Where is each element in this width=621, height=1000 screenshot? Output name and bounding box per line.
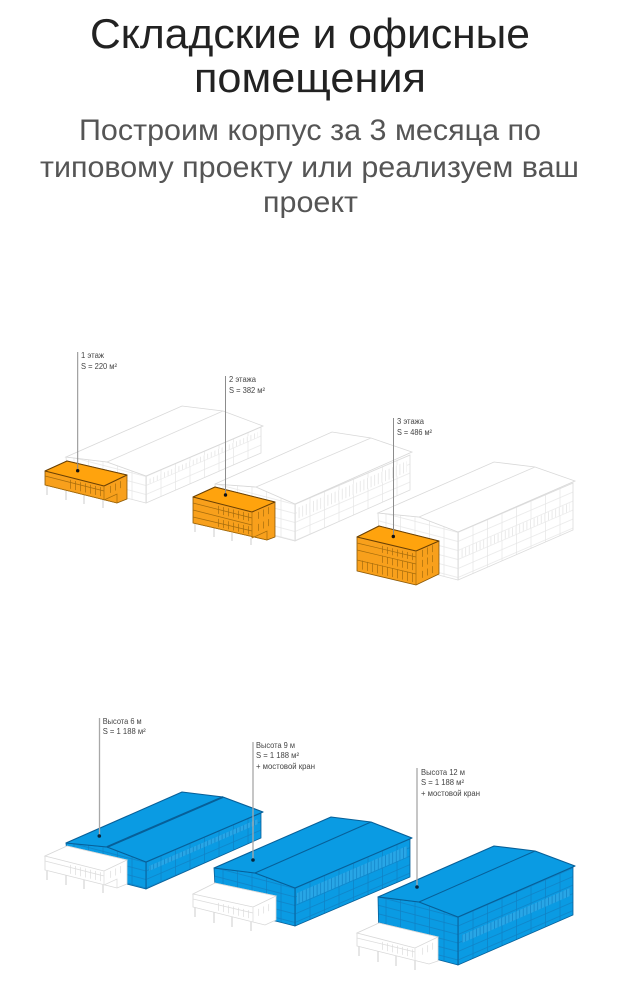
subtitle: проект	[263, 186, 358, 219]
warehouse outline 3	[378, 462, 575, 580]
title: Складские и офисные	[90, 10, 530, 57]
blue warehouse: 6 m	[66, 792, 263, 889]
blue warehouse: 9 m	[214, 817, 412, 926]
diagram: office block options	[45, 351, 575, 585]
title	[90, 10, 530, 101]
orange block: 1 floor	[45, 461, 127, 508]
callout: 3 floors: 3 этажа	[397, 417, 425, 426]
callout: height 12 m: Высота 12 м	[421, 768, 465, 777]
subtitle: Построим корпус за 3 месяца по	[79, 114, 541, 147]
white block under 12 m warehouse	[357, 923, 438, 970]
callout: 2 floors	[224, 375, 265, 497]
callout: 2 floors: 2 этажа	[229, 375, 257, 384]
callout: height 12 m: S = 1 188 м²	[421, 778, 464, 787]
callout: height 9 m: S = 1 188 м²	[256, 751, 299, 760]
callout: height 9 m	[251, 741, 315, 862]
orange block: 2 floors	[193, 487, 275, 545]
white block under 9 m warehouse	[193, 883, 276, 931]
callout: height 12 m	[415, 768, 480, 889]
subtitle	[40, 114, 579, 219]
callout: 1 floor	[76, 351, 117, 472]
warehouse outline 2	[215, 432, 412, 541]
callout: height 6 m: S = 1 188 м²	[103, 727, 146, 736]
orange block: 3 floors	[357, 526, 439, 585]
diagram: warehouse height options	[45, 717, 575, 970]
callout: 1 floor: 1 этаж	[81, 351, 105, 360]
callout: 3 floors: S = 486 м²	[397, 428, 432, 437]
callout: height 12 m: + мостовой кран	[421, 789, 480, 798]
callout: 3 floors	[392, 417, 432, 538]
callout: height 6 m: Высота 6 м	[103, 717, 142, 726]
blue warehouse: 12 m	[378, 846, 575, 965]
title: помещения	[194, 54, 426, 101]
callout: height 6 m	[98, 717, 146, 838]
callout: height 9 m: + мостовой кран	[256, 762, 315, 771]
white block under 6 m warehouse	[45, 846, 127, 893]
callout: 1 floor: S = 220 м²	[81, 362, 117, 371]
callout: 2 floors: S = 382 м²	[229, 386, 265, 395]
callout: height 9 m: Высота 9 м	[256, 741, 295, 750]
warehouse outline 1	[66, 406, 263, 503]
subtitle: типовому проекту или реализуем ваш	[40, 151, 579, 184]
